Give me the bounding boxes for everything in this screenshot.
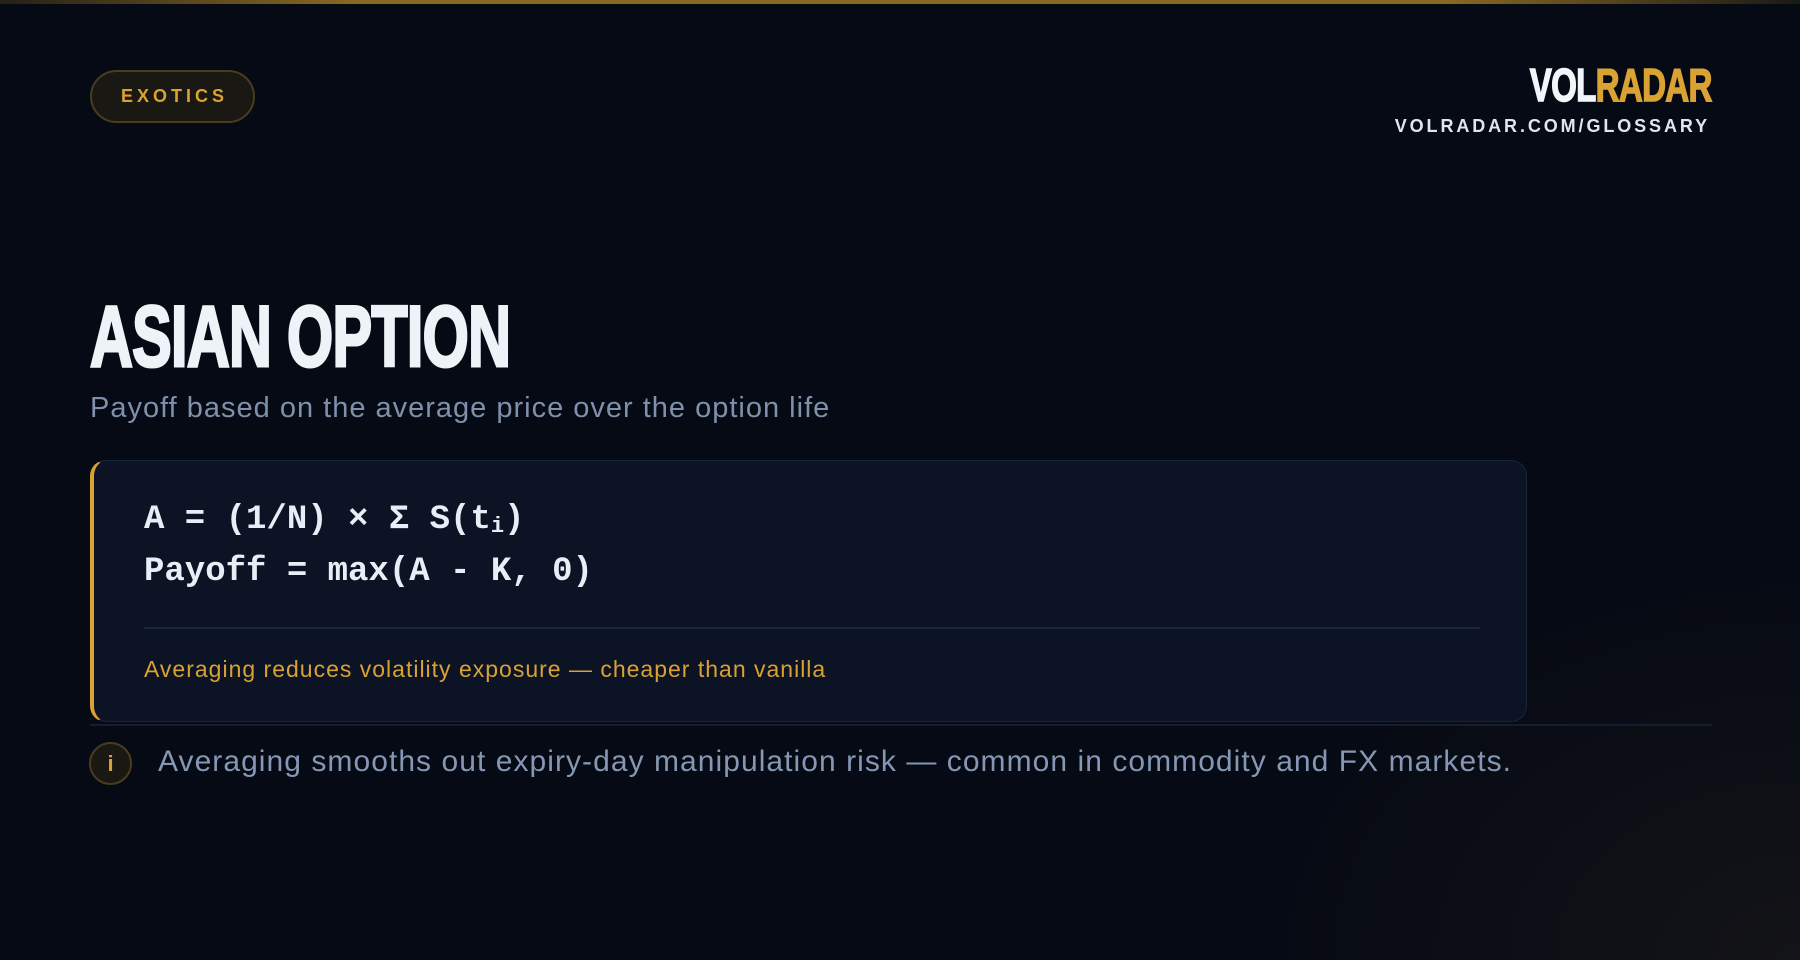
formula line 1: A = (1/N) × Σ S(ti) (144, 501, 524, 539)
panel: formula card (90, 460, 1527, 722)
info text: Averaging smooths out expiry-day manipulation risk — common in commodity and FX markets. (158, 745, 1512, 778)
icon: info (89, 742, 132, 785)
icon: info: i (107, 750, 114, 776)
logo: VOLRADAR (1530, 59, 1712, 111)
category pill (90, 70, 255, 123)
formula line 2: Payoff = max(A - K, 0) (144, 553, 593, 591)
category pill: EXOTICS (121, 86, 228, 106)
url: VOLRADAR.COM/GLOSSARY (1395, 116, 1710, 136)
formula note: Averaging reduces volatility exposure — cheaper than vanilla (144, 656, 826, 682)
subtitle: Payoff based on the average price over the option life (90, 392, 830, 424)
title: ASIAN OPTION (90, 289, 510, 385)
